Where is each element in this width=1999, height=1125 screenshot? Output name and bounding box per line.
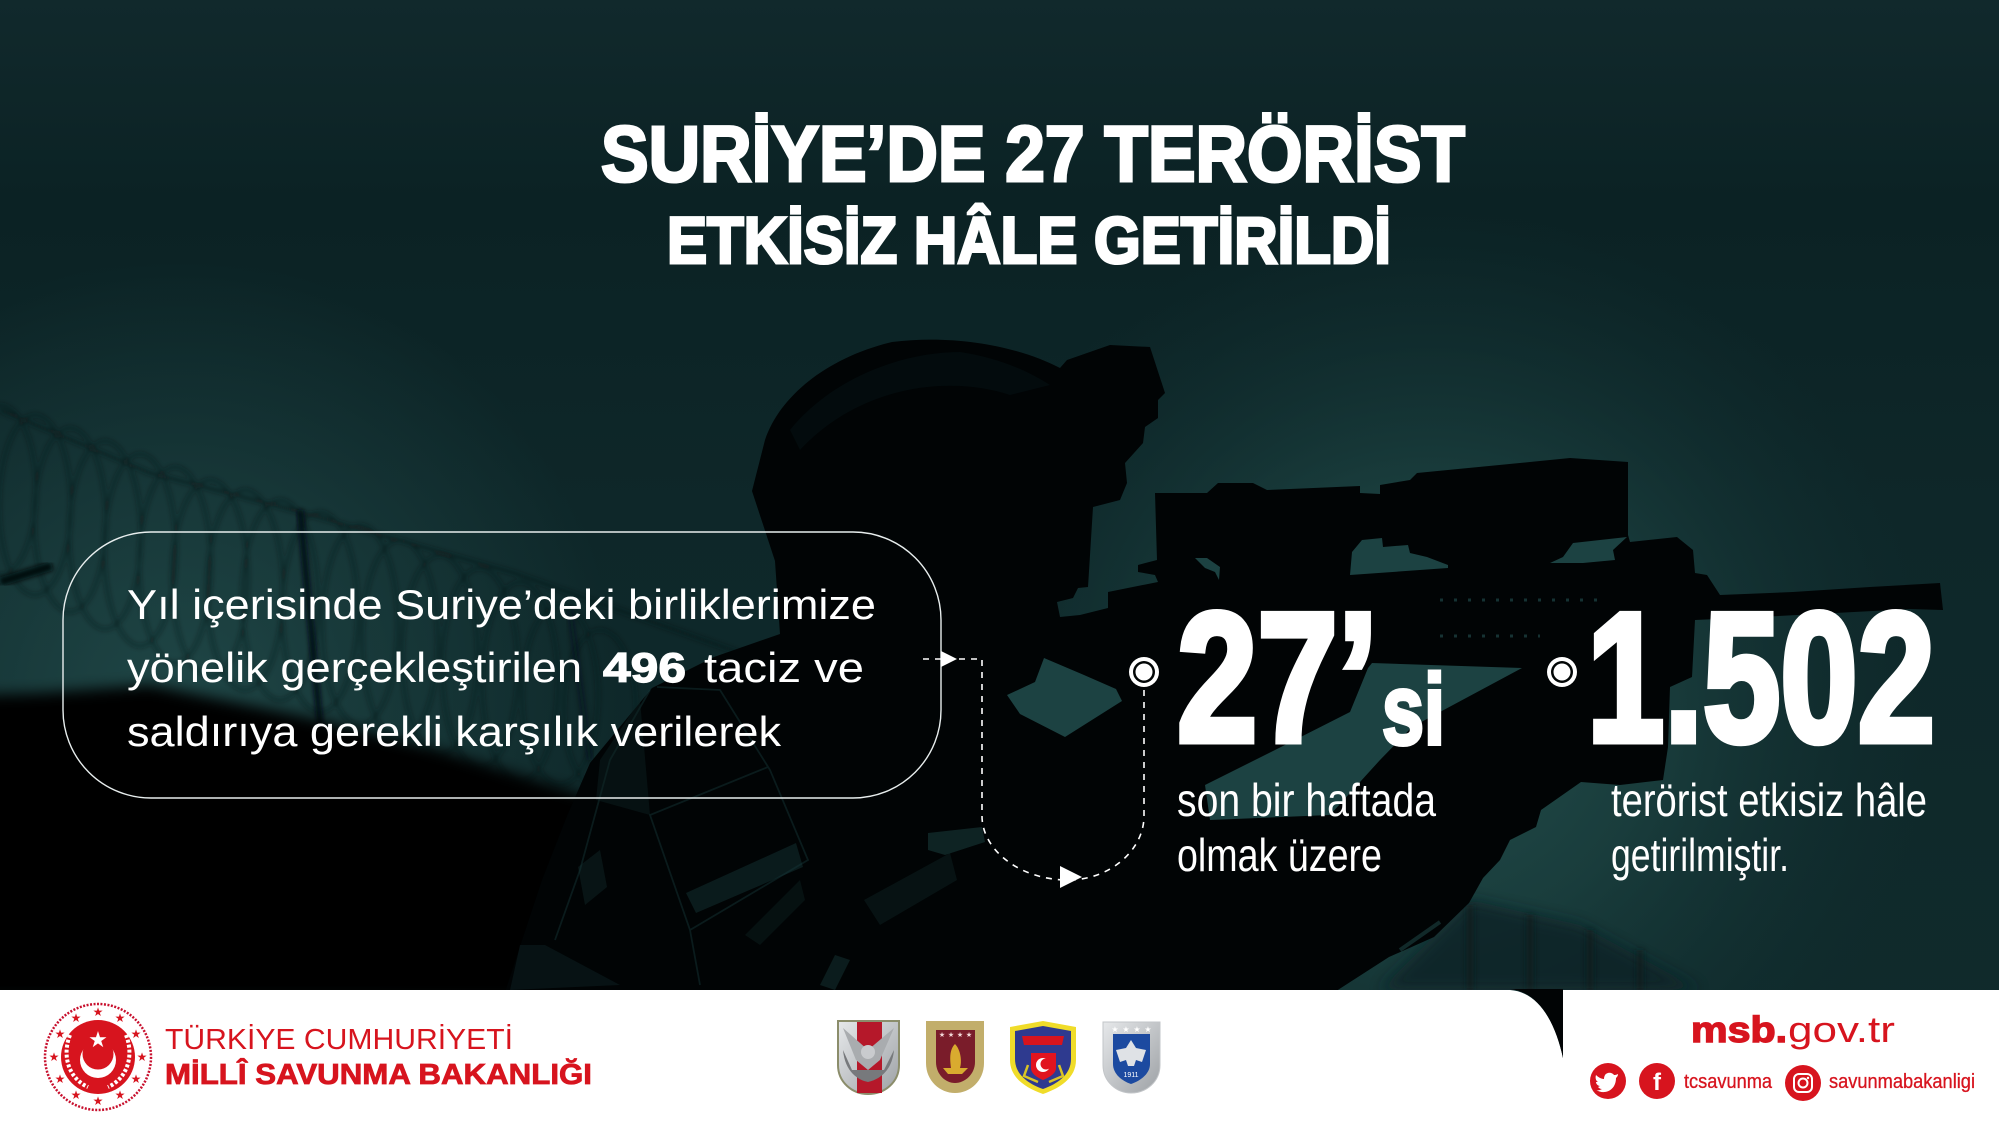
logo: ministry seal [45,1004,151,1110]
arrow: dashed connector from callout to figures [923,651,1144,888]
callout text: saldırıya gerekli karşılık verilerek [127,708,782,755]
title line 1: SURİYE’DE 27 TERÖRİST [601,109,1465,198]
callout text [127,581,876,755]
icon: target marker 1 [1129,657,1159,687]
badge: air forces: ★ [1133,1025,1141,1034]
text: terörist etkisiz hâle getirilmiştir: getirilmiştir. [1611,829,1789,881]
callout text: yönelik gerçekleştirilen [127,644,582,691]
logo: ministry seal: ★ [131,1027,141,1041]
vest and sleeve highlights [510,352,1440,990]
icon: instagram [1785,1065,1821,1101]
callout text: 496 [603,644,686,691]
badge: land forces [926,1021,984,1093]
badge: air forces: ★ [1144,1025,1152,1034]
icon: twitter [1590,1063,1626,1099]
logo: ministry seal: ★ [115,1088,125,1102]
badge: general staff [838,1021,899,1094]
title line 2: ETKİSİZ HÂLE GETİRİLDİ [667,203,1391,277]
website: gov.tr [1788,1009,1895,1050]
panel: summary callout [63,532,941,798]
text: son bir haftada olmak üzere: son bir haftada [1177,774,1436,826]
title [601,109,1465,277]
stat: 27'si: si [1382,654,1445,766]
logo: ministry seal: ★ [71,1011,81,1025]
rifle gaps and arm gaps showing sky [1350,538,1448,575]
badge: land forces: ★ [948,1031,954,1039]
panel: footer [0,989,1999,1125]
soldier silhouette with rifle [504,340,1943,995]
icon: facebook [1639,1063,1675,1099]
background: razor wire fence and dark ground on the left [0,405,1700,1000]
badge: air forces [1103,1022,1160,1093]
callout text: Yıl içerisinde Suriye’deki birliklerimize [127,581,876,628]
logo: ministry seal: ★ [115,1011,125,1025]
text: terörist etkisiz hâle getirilmiştir [1611,774,1927,881]
stat: 27'si: 27’ [1177,574,1378,780]
text: son bir haftada olmak üzere [1177,774,1436,881]
badge: naval forces [1010,1021,1076,1094]
badge: air forces: ★ [1122,1025,1130,1034]
ministry name: MİLLÎ SAVUNMA BAKANLIĞI [165,1057,592,1091]
text: son bir haftada olmak üzere: olmak üzere [1177,829,1382,881]
handle: tcsavunma: tcsavunma [1684,1071,1773,1093]
logo: ministry seal: ★ [137,1050,147,1064]
logo: ministry seal: ★ [131,1072,141,1086]
logo: ministry seal: ★ [93,1094,103,1108]
badge: land forces: ★ [966,1031,972,1039]
text: terörist etkisiz hâle getirilmiştir: terörist etkisiz hâle [1611,774,1927,826]
logo: ministry seal: ★ [55,1072,65,1086]
logo: ministry seal: ★ [93,1005,103,1019]
website [1691,1009,1895,1050]
icon: facebook: f [1653,1069,1662,1096]
logo: ministry seal: ★ [88,1027,108,1052]
logo: ministry seal: ★ [71,1088,81,1102]
badge: land forces: ★ [939,1031,945,1039]
badge: land forces: ★ [957,1031,963,1039]
ministry name: TÜRKİYE CUMHURİYETİ [165,1023,513,1056]
logo: ministry seal: ★ [55,1027,65,1041]
badge: air forces: ★ [1111,1025,1119,1034]
icon: target marker 2 [1547,657,1577,687]
callout text: taciz ve [704,644,864,691]
logo: ministry seal: ★ [49,1050,59,1064]
ministry name [165,1023,592,1091]
badge: air forces: 1911 [1123,1072,1139,1079]
website: msb. [1691,1009,1787,1050]
handle: savunmabakanligi: savunmabakanligi [1829,1071,1975,1093]
